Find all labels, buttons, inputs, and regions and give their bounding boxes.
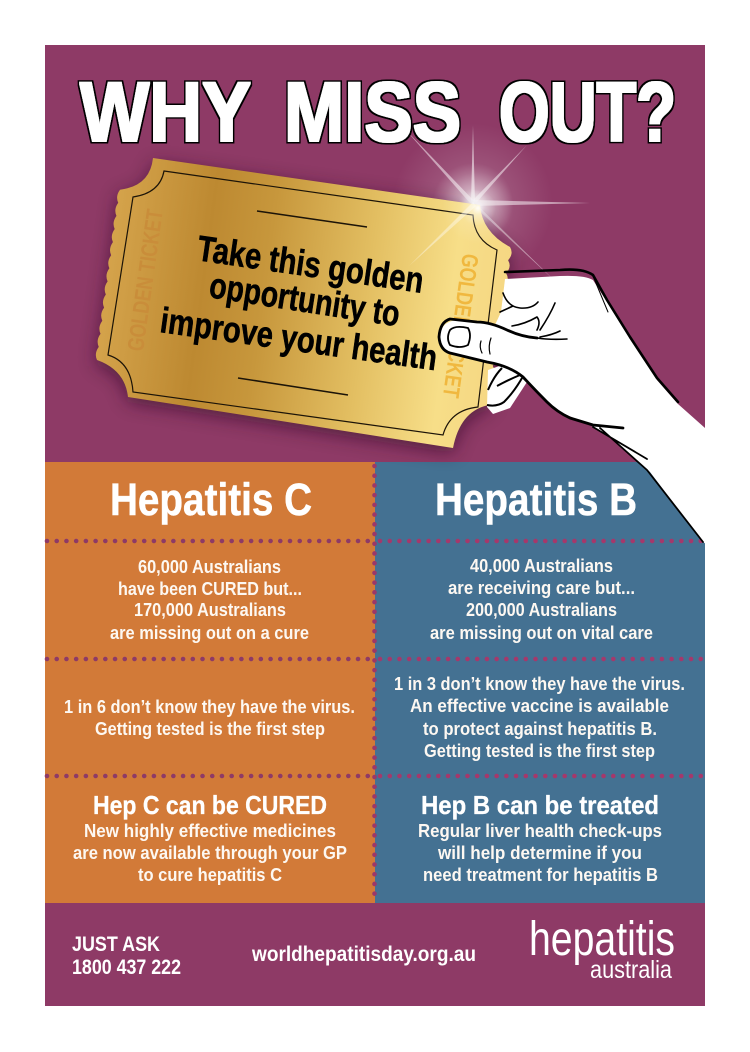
text block: hep C numbers: have been CURED but... xyxy=(118,579,302,599)
text block: hep B testing xyxy=(394,674,685,761)
ticket message: Take this golden xyxy=(195,227,426,301)
logo: hepatitis australia: australia xyxy=(590,956,672,984)
ticket message xyxy=(158,227,440,378)
ticket stub label right: GOLDEN TICKET xyxy=(438,252,484,400)
text block: hep B treatment: will help determine if you xyxy=(437,843,642,863)
text block: hep B testing: to protect against hepatitis B. xyxy=(423,719,657,739)
text block: hep C cure: New highly effective medicines xyxy=(84,821,336,841)
text block: hep C testing: 1 in 6 don’t know they have the virus. xyxy=(64,697,355,717)
text block: hep B testing: Getting tested is the first step xyxy=(424,741,655,761)
text block: hep B treatment: Regular liver health check-ups xyxy=(418,821,662,841)
heading: hepatitis C: Hepatitis C xyxy=(110,474,312,525)
heading: hepatitis B: Hepatitis B xyxy=(435,474,637,525)
lower fingers xyxy=(487,364,527,414)
contact: 1800 437 222 xyxy=(72,956,181,979)
text block: hep B numbers: are receiving care but... xyxy=(448,578,635,598)
golden ticket xyxy=(96,158,514,453)
text block: hep B treatment: Hep B can be treated xyxy=(421,790,659,820)
text block: hep B numbers: 200,000 Australians xyxy=(466,600,617,620)
text block: hep C cure: Hep C can be CURED xyxy=(93,790,327,820)
text block: hep B treatment: need treatment for hepatitis B xyxy=(423,865,658,885)
ticket stub label left: GOLDEN TICKET xyxy=(122,207,168,353)
text block: hep B numbers xyxy=(430,556,653,643)
hand outlines xyxy=(439,270,703,542)
text block: hep C cure: are now available through your GP xyxy=(73,843,347,863)
panel: hepatitis B xyxy=(375,462,705,903)
title xyxy=(80,65,676,159)
text block: hep C numbers: 170,000 Australians xyxy=(134,600,286,620)
text block: hep B numbers: 40,000 Australians xyxy=(470,556,613,576)
ticket sparkle overlay xyxy=(409,172,514,266)
ticket inner border xyxy=(108,171,497,435)
panel: hepatitis C xyxy=(45,462,375,903)
title: WHY xyxy=(80,65,251,159)
text block: hep C testing xyxy=(64,697,355,739)
icon: hand holding ticket xyxy=(439,270,712,548)
logo: hepatitis australia xyxy=(529,913,675,984)
sparkle xyxy=(393,123,590,283)
text block: hep B treatment xyxy=(418,790,662,885)
text block: hep C testing: Getting tested is the first step xyxy=(95,719,325,739)
title: OUT? xyxy=(499,65,676,159)
website: worldhepatitisday.org.au xyxy=(251,943,476,966)
text block: hep B numbers: are missing out on vital care xyxy=(430,623,653,643)
ticket message: opportunity to xyxy=(207,264,403,334)
text block: hep C numbers xyxy=(110,557,309,643)
text block: hep C cure: to cure hepatitis C xyxy=(138,865,282,885)
text block: hep B testing: An effective vaccine is available xyxy=(410,696,669,716)
title: MISS xyxy=(284,65,461,159)
text block: hep C cure xyxy=(73,790,347,885)
text block: hep B testing: 1 in 3 don’t know they have the virus. xyxy=(394,674,685,694)
text block: hep C numbers: are missing out on a cure xyxy=(110,623,309,643)
contact: JUST ASK xyxy=(72,933,160,956)
footer xyxy=(72,913,675,984)
contact xyxy=(72,933,181,979)
text block: hep C numbers: 60,000 Australians xyxy=(138,557,281,577)
hand and arm shape xyxy=(440,276,712,548)
logo: hepatitis australia: hepatitis xyxy=(529,913,675,966)
ticket message: improve your health xyxy=(158,299,440,378)
ticket body xyxy=(96,158,512,448)
